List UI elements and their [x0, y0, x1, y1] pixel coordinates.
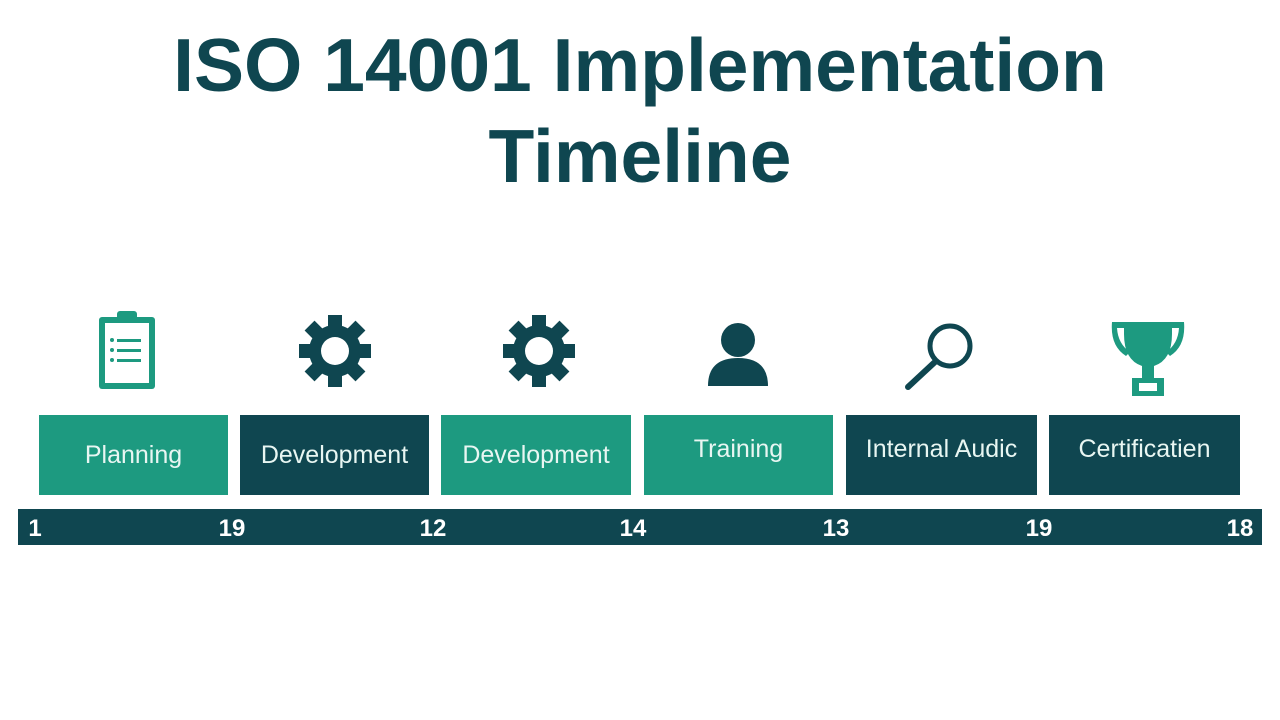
icon: gear 2 — [503, 315, 575, 387]
timeline numbers: 1 — [28, 515, 42, 542]
timeline numbers: 14 — [620, 515, 646, 542]
timeline numbers: 13 — [823, 515, 849, 542]
icon: clipboard — [99, 311, 155, 389]
box: Certification: Certificatien — [1078, 434, 1210, 462]
icon: trophy — [1112, 322, 1184, 396]
timeline numbers: 12 — [420, 515, 446, 542]
box: Planning: Planning — [85, 440, 182, 468]
box: Internal Audic: Internal Audic — [866, 434, 1017, 462]
title: ISO 14001 Implementation — [173, 23, 1107, 107]
box: Development 2: Development — [462, 440, 610, 468]
timeline bar — [18, 509, 1262, 545]
icon: magnifier — [905, 324, 972, 390]
box: Development 1: Development — [261, 440, 408, 468]
box: Certification — [1049, 415, 1240, 495]
box: Development 2 — [441, 415, 631, 495]
icon: person — [708, 323, 768, 386]
box: Internal Audic — [846, 415, 1037, 495]
title: Timeline — [489, 114, 791, 198]
icon: gear 1 — [299, 315, 371, 387]
box: Planning — [39, 415, 228, 495]
timeline numbers: 19 — [219, 515, 245, 542]
timeline numbers: 18 — [1227, 515, 1253, 542]
box: Training: Training — [694, 434, 783, 462]
title — [173, 23, 1107, 198]
timeline numbers: 19 — [1026, 515, 1052, 542]
box: Development 1 — [240, 415, 429, 495]
box: Training — [644, 415, 833, 495]
